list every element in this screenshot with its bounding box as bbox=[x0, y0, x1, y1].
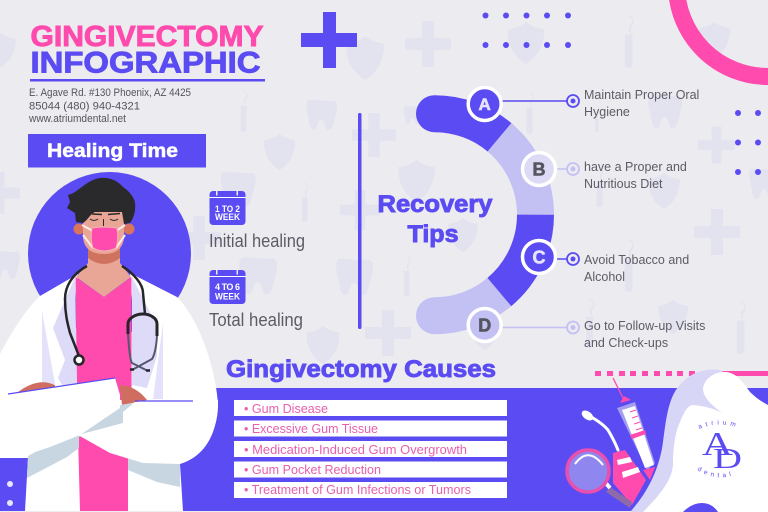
hands bbox=[18, 382, 55, 394]
logo blob bbox=[630, 370, 768, 512]
title line 1: GINGIVECTOMY bbox=[30, 21, 264, 53]
dot grid top bbox=[482, 12, 571, 48]
tip C: Alcohol bbox=[584, 270, 625, 284]
lavender blob bbox=[630, 370, 735, 512]
coat lining bbox=[53, 277, 157, 388]
calendar icon: 4 to 6 week: 4 TO 6 bbox=[215, 282, 240, 292]
magnifier bbox=[606, 487, 632, 508]
coat body bbox=[0, 273, 218, 511]
atrium dental logo: D bbox=[713, 443, 742, 475]
calendar icon: 1 to 2 week: WEEK bbox=[215, 212, 240, 222]
causes panel background bbox=[0, 388, 768, 511]
tip D: D bbox=[478, 316, 491, 336]
left arm bbox=[0, 378, 120, 458]
mask bbox=[82, 225, 125, 248]
tip A: Maintain Proper Oral bbox=[584, 88, 699, 102]
tip D: Go to Follow-up Visits bbox=[584, 319, 705, 333]
address block bbox=[28, 87, 191, 125]
cause text: • Gum Pocket Reduction bbox=[244, 463, 381, 477]
band dots bbox=[7, 481, 13, 506]
cause text: • Excessive Gum Tissue bbox=[244, 422, 378, 436]
brows and eyes bbox=[92, 214, 120, 215]
cause text: • Medication-Induced Gum Overgrowth bbox=[244, 443, 467, 457]
white blob bbox=[643, 372, 768, 512]
tip A: A bbox=[479, 95, 491, 114]
tip B: have a Proper and bbox=[584, 160, 687, 174]
doctor illustration bbox=[0, 172, 218, 511]
tip A bbox=[468, 88, 699, 120]
tip C: C bbox=[532, 248, 546, 268]
dot grid right bbox=[735, 110, 761, 175]
atrium dental logo bbox=[698, 420, 742, 478]
cause text: • Treatment of Gum Infections or Tumors bbox=[244, 483, 471, 497]
tip A: Hygiene bbox=[584, 105, 630, 119]
atrium dental logo: dental bbox=[698, 467, 731, 478]
atrium dental logo: A bbox=[702, 426, 734, 463]
arc segment C bbox=[499, 215, 536, 292]
tip B bbox=[522, 152, 687, 191]
pink dashed strip bbox=[595, 371, 768, 376]
face bbox=[83, 205, 124, 254]
total healing label: Total healing bbox=[209, 310, 303, 330]
calendar icon: 1 to 2 week: 1 TO 2 bbox=[215, 204, 240, 214]
mirror handle bbox=[593, 418, 618, 450]
cause text: • Gum Disease bbox=[244, 402, 328, 416]
pink grip bbox=[613, 450, 646, 505]
purple blob accent bbox=[683, 503, 718, 512]
address block: www.atriumdental.net bbox=[28, 113, 126, 125]
vertical divider bbox=[358, 113, 362, 329]
scrub bbox=[76, 277, 132, 511]
purple circle backdrop bbox=[28, 172, 191, 335]
tip B: Nutritious Diet bbox=[584, 177, 663, 191]
healing time banner: Healing Time bbox=[47, 140, 178, 162]
title line 2: INFOGRAPHIC bbox=[30, 46, 260, 80]
cause list bbox=[234, 400, 507, 498]
calendar icon: 4 to 6 week bbox=[210, 268, 246, 304]
tip D bbox=[468, 308, 705, 350]
calendar icon: 4 to 6 week: WEEK bbox=[215, 292, 240, 302]
pink ring bbox=[676, 0, 768, 76]
cause text bbox=[244, 402, 471, 497]
syringe bbox=[613, 378, 655, 470]
recovery tips heading: Tips bbox=[408, 221, 458, 248]
plus icon bbox=[301, 12, 357, 68]
clipboard edges bbox=[8, 378, 193, 401]
address block: E. Agave Rd. #130 Phoenix, AZ 4425 bbox=[29, 87, 191, 99]
atrium dental logo: atrium bbox=[698, 420, 736, 429]
initial healing label: Initial healing bbox=[209, 231, 305, 251]
dental tools illustration bbox=[567, 378, 655, 508]
hair bbox=[67, 178, 135, 224]
cause rows bbox=[234, 400, 507, 498]
arc segment A bbox=[434, 114, 500, 137]
title bbox=[30, 21, 265, 82]
tip C bbox=[522, 240, 689, 284]
calendar icon: 1 to 2 week bbox=[210, 190, 246, 225]
causes heading: Gingivectomy Causes bbox=[226, 356, 496, 383]
sleeve shadows bbox=[27, 402, 142, 478]
healing time banner bbox=[28, 134, 206, 168]
recovery arc bbox=[434, 114, 536, 316]
ears bbox=[74, 224, 84, 234]
neck shadow bbox=[88, 245, 120, 264]
chest skin bbox=[76, 240, 131, 297]
address block: 85044 (480) 940-4321 bbox=[29, 100, 140, 112]
tip B: B bbox=[532, 160, 546, 180]
arc segment D bbox=[434, 292, 499, 316]
recovery tips heading: Recovery bbox=[378, 191, 493, 218]
tip D: and Check-ups bbox=[584, 336, 668, 350]
stethoscope bbox=[65, 266, 87, 356]
tip C: Avoid Tobacco and bbox=[584, 253, 689, 267]
arc segment B bbox=[499, 137, 536, 215]
right arm bbox=[78, 395, 218, 464]
recovery tips heading bbox=[378, 191, 493, 248]
